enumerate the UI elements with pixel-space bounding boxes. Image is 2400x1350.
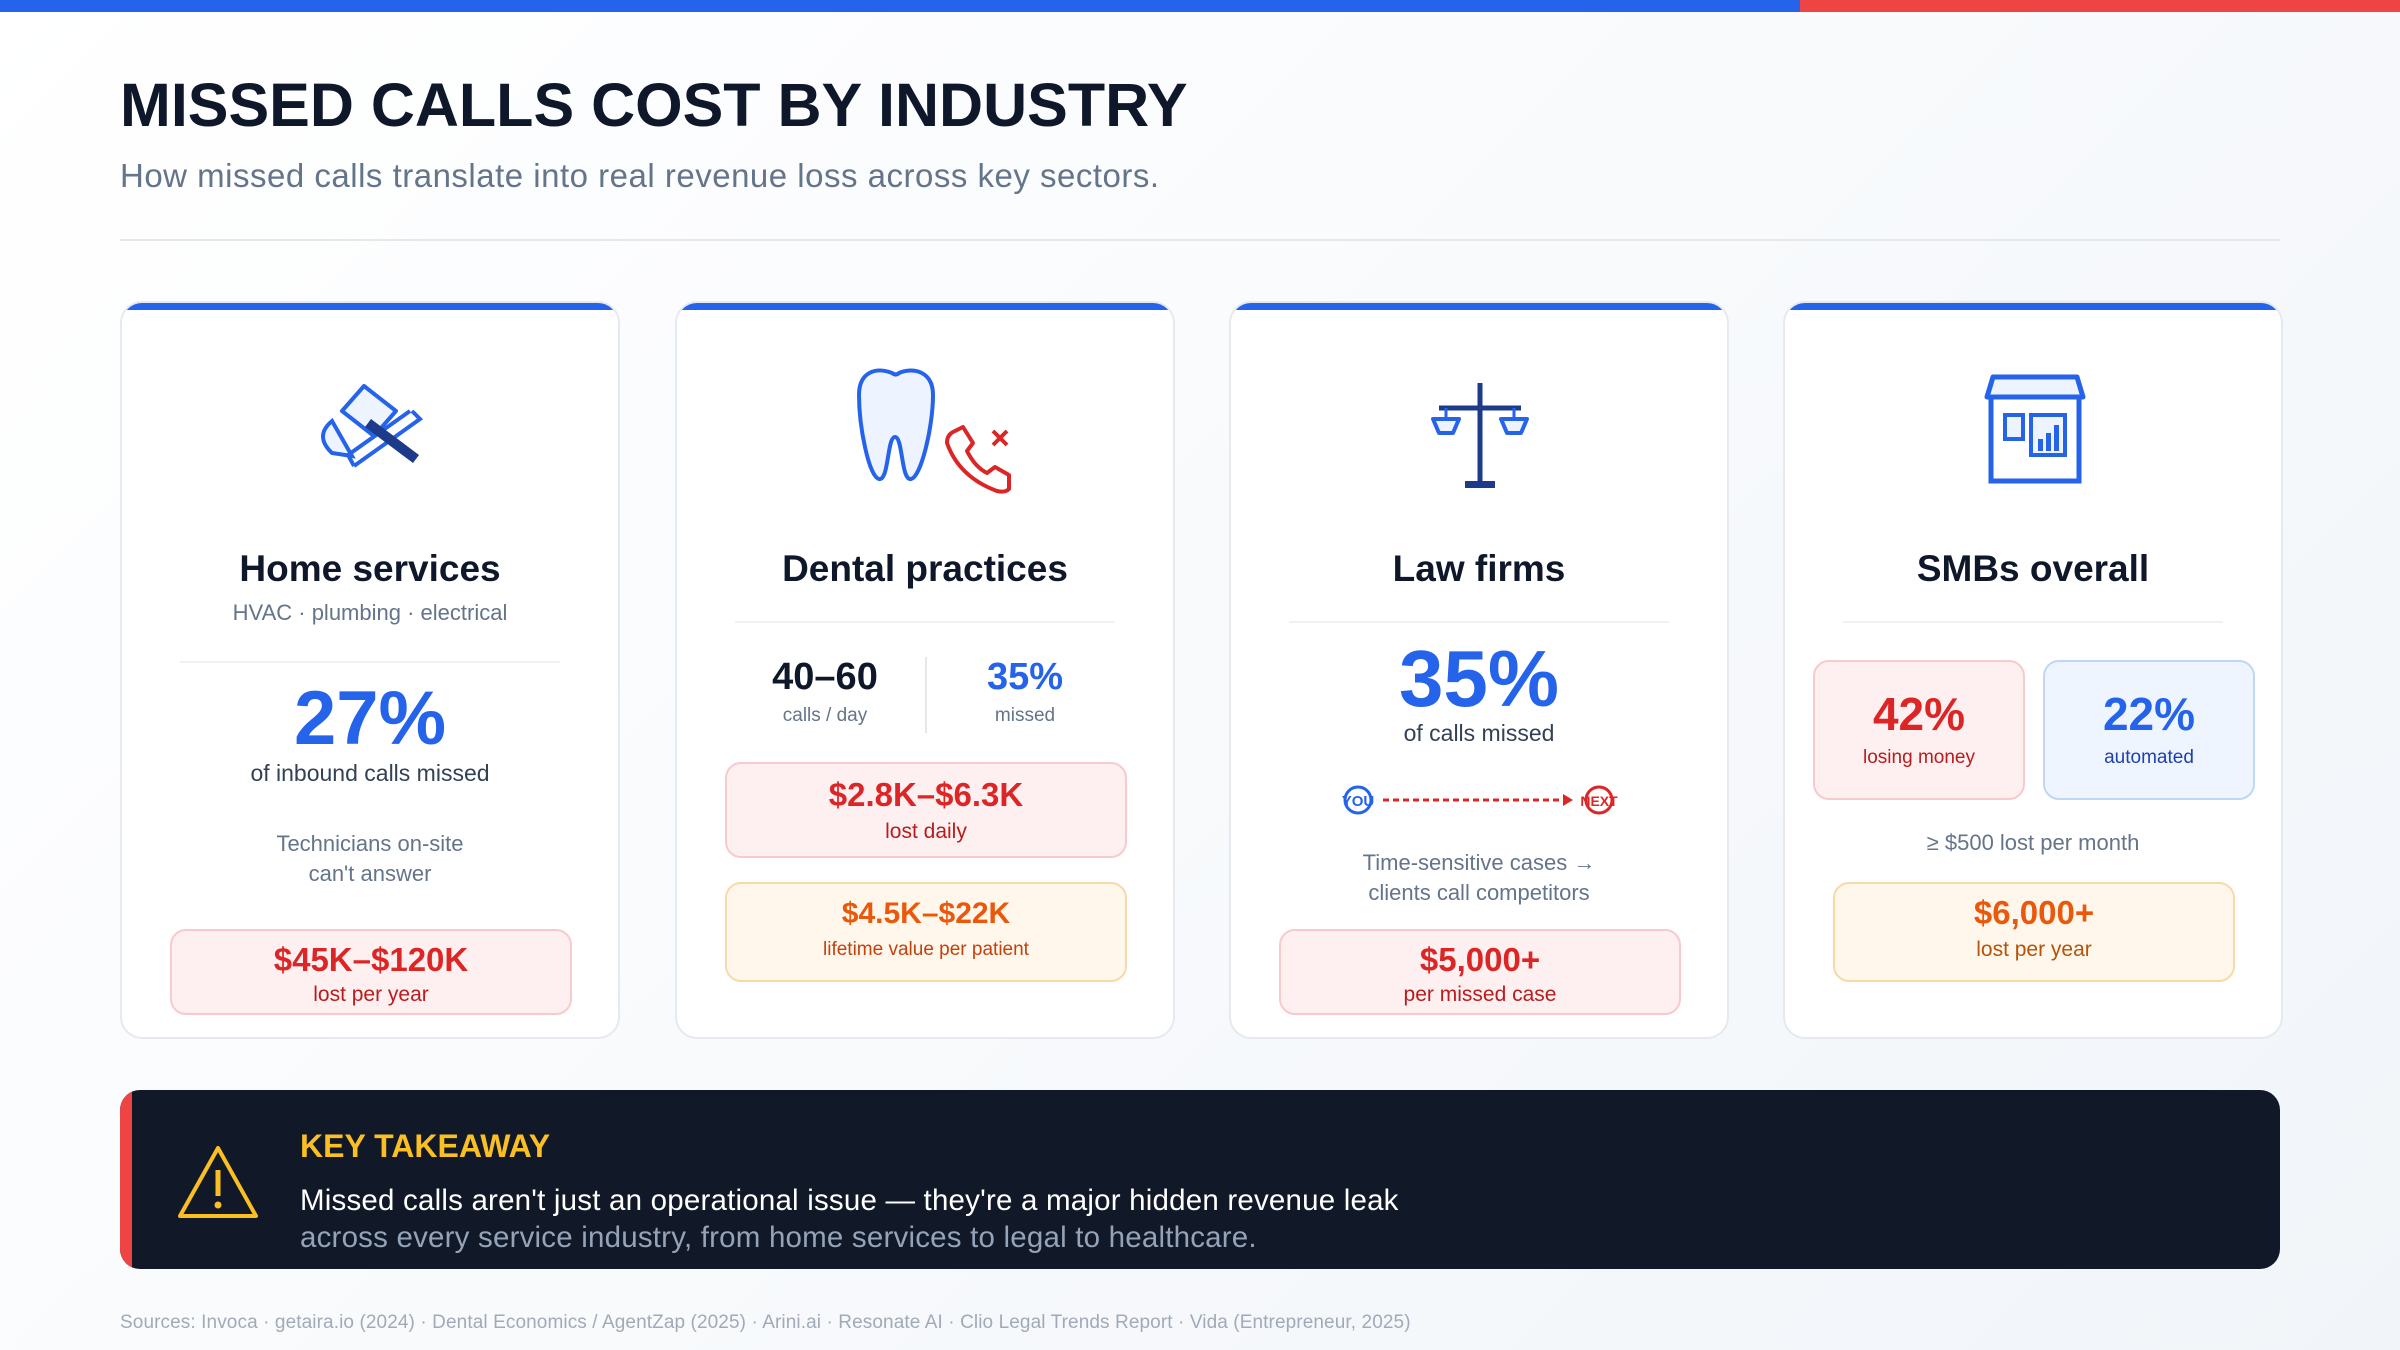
note bbox=[276, 831, 464, 886]
stat: automated: 22% bbox=[2103, 688, 2195, 740]
stat: losing money: 42% bbox=[1873, 688, 1965, 740]
callout bbox=[1279, 929, 1681, 1015]
callout: lost per year bbox=[313, 983, 429, 1006]
diagram: you to next: NEXT bbox=[1580, 793, 1618, 809]
text: Missed calls aren't just an operational issue — they're a major hidden revenue leak bbox=[300, 1184, 1399, 1217]
callout: $5,000+ bbox=[1420, 941, 1540, 978]
icon: tooth and phone bbox=[857, 368, 1011, 494]
callout: lifetime value: lifetime value per patient bbox=[823, 939, 1029, 960]
callout: lost per year bbox=[1976, 938, 2092, 961]
panel: SMBs bbox=[1783, 301, 2283, 1039]
text bbox=[300, 1184, 1399, 1254]
stat: automated: automated bbox=[2104, 747, 2194, 768]
heading: KEY TAKEAWAY bbox=[300, 1128, 550, 1164]
subtitle: How missed calls translate into real revenue loss across key sectors. bbox=[120, 157, 1160, 194]
sources: Sources: Invoca · getaira.io (2024) · Dental Economics / AgentZap (2025) · Arini.ai · Resonate AI · Clio Legal Trends Report · Vida (Entrepreneur, 2025) bbox=[120, 1312, 1411, 1333]
text: across every service industry, from home services to legal to healthcare. bbox=[300, 1221, 1257, 1254]
stat: missed: 35% bbox=[987, 656, 1063, 698]
callout: lifetime value bbox=[725, 882, 1127, 982]
callout: lifetime value: $4.5K–$22K bbox=[842, 897, 1010, 930]
heading: SMBs overall bbox=[1917, 548, 2149, 589]
icon: warning bbox=[178, 1146, 258, 1218]
note: ≥ $500 lost per month bbox=[1927, 830, 2139, 855]
stat: automated bbox=[2043, 660, 2255, 800]
diagram: you to next: YOU bbox=[1342, 793, 1374, 810]
callout: lost daily: lost daily bbox=[885, 820, 967, 843]
panel: dental bbox=[675, 301, 1175, 1039]
diagram: you to next bbox=[1342, 786, 1618, 814]
stat: calls per day: calls / day bbox=[783, 705, 867, 726]
stat: losing money bbox=[1813, 660, 2025, 800]
stat: calls per day: 40–60 bbox=[772, 656, 878, 698]
callout: per missed case bbox=[1404, 983, 1556, 1006]
title: MISSED CALLS COST BY INDUSTRY bbox=[120, 71, 1188, 139]
callout: lost daily: $2.8K–$6.3K bbox=[829, 776, 1023, 813]
icon: scales bbox=[1430, 383, 1529, 488]
icon: storefront bbox=[1984, 374, 2086, 484]
top accent bar bbox=[0, 0, 2400, 12]
heading: Dental practices bbox=[782, 548, 1068, 589]
stat: losing money: losing money bbox=[1863, 747, 1975, 768]
note: can't answer bbox=[309, 861, 431, 886]
heading: Law firms bbox=[1393, 548, 1565, 589]
icon: tools bbox=[321, 384, 423, 468]
note: Time-sensitive cases → bbox=[1363, 850, 1595, 875]
panel: law firms: of calls missed bbox=[1404, 720, 1554, 746]
panel: home services bbox=[120, 301, 620, 1039]
callout: $45K–$120K bbox=[274, 941, 468, 978]
note: Technicians on-site bbox=[276, 831, 464, 856]
callout bbox=[1833, 882, 2235, 982]
stat: calls per day bbox=[772, 656, 878, 726]
stat: 35% bbox=[1399, 634, 1559, 723]
callout: key takeaway bbox=[120, 1090, 2280, 1269]
stat: 27% bbox=[294, 676, 446, 761]
callout bbox=[170, 929, 572, 1015]
panel: law firms bbox=[1229, 301, 1729, 1039]
subheading: HVAC · plumbing · electrical bbox=[233, 600, 507, 625]
note bbox=[1363, 850, 1595, 905]
panel: home services: of inbound calls missed bbox=[250, 760, 490, 786]
heading: Home services bbox=[239, 548, 501, 589]
callout: $6,000+ bbox=[1974, 894, 2094, 931]
note: clients call competitors bbox=[1368, 880, 1590, 905]
stat: missed bbox=[987, 656, 1063, 726]
callout: lost daily bbox=[725, 762, 1127, 858]
stat: missed: missed bbox=[995, 705, 1055, 726]
